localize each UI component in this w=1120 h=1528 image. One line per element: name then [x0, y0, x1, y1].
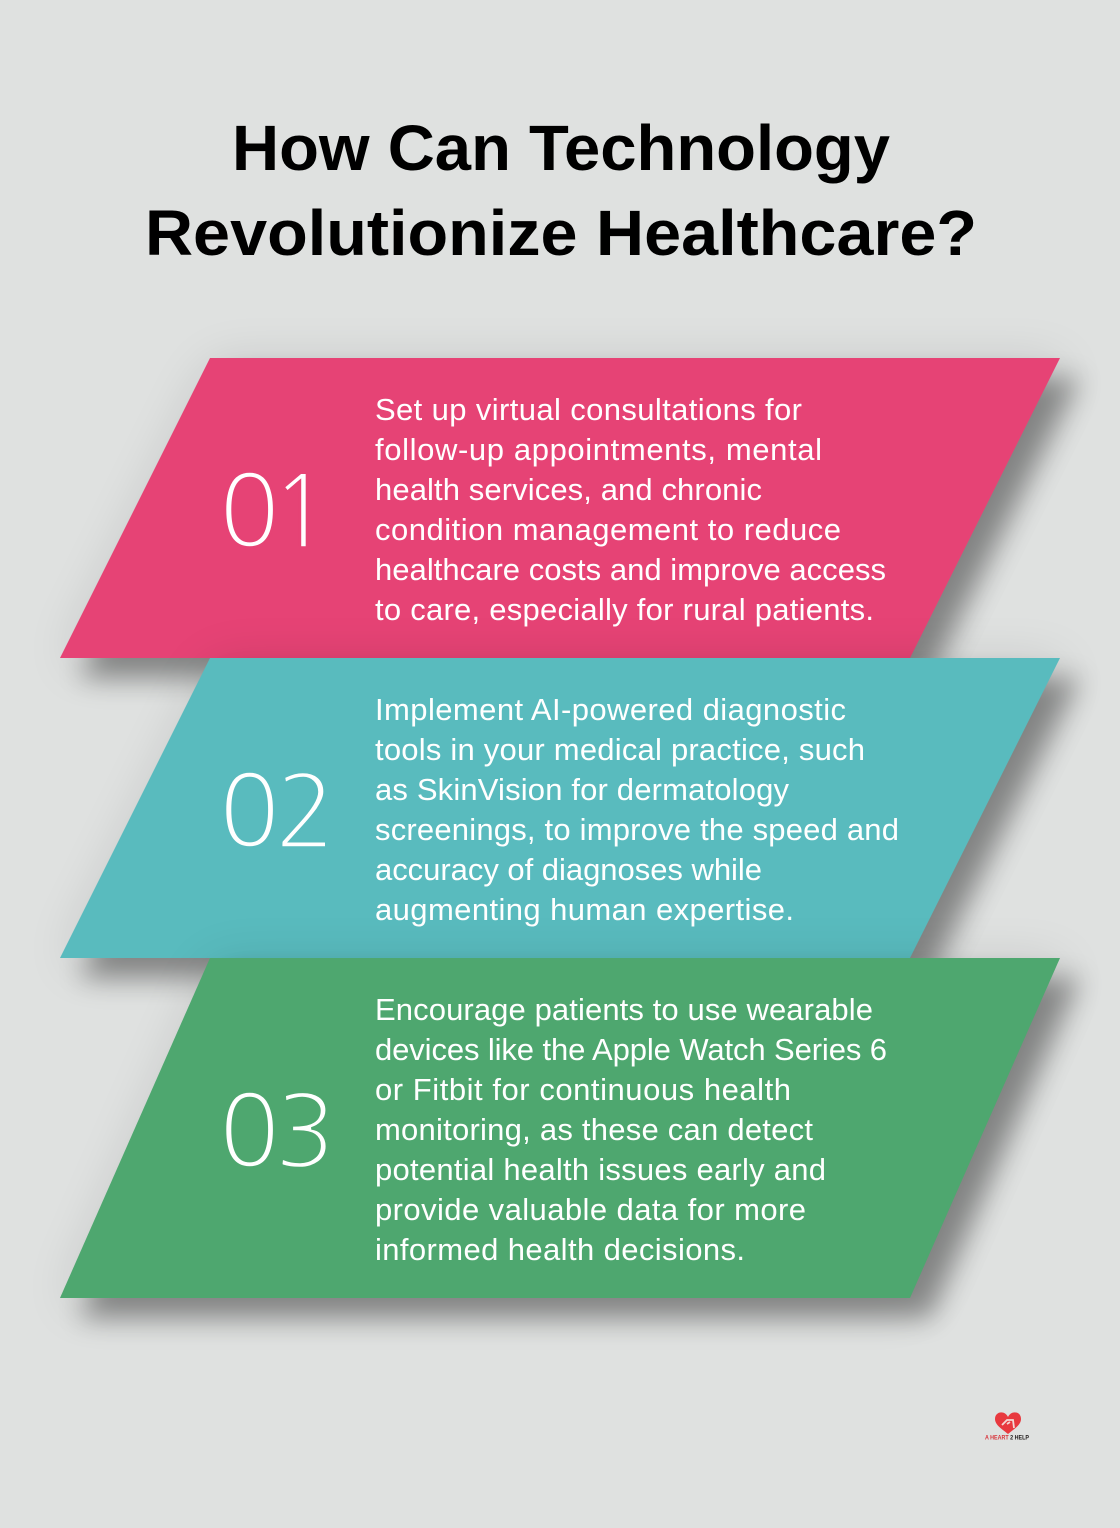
text: step 02 description: Implement AI-powered diagnostic: [375, 692, 846, 727]
text: step 02 description: as SkinVision for dermatology: [375, 772, 790, 807]
number 01: 01: [219, 462, 331, 562]
text: step 02 description: accuracy of diagnoses while: [375, 852, 762, 887]
text: step 03 description: [375, 992, 887, 1267]
text: step 01 description: [375, 392, 886, 627]
title: [145, 112, 977, 269]
title: How Can Technology: [232, 112, 890, 184]
text: step 02 description: screenings, to improve the speed and: [375, 812, 899, 847]
text: step 03 description: informed health decisions.: [375, 1232, 745, 1267]
logo wordmark: A HEART 2 HELP: [985, 1436, 1029, 1442]
text: step 01 description: Set up virtual consultations for: [375, 392, 802, 427]
panel: step 02: [60, 658, 1080, 978]
logo: A Heart 2 Help: [985, 1412, 1029, 1442]
text: step 03 description: Encourage patients to use wearable: [375, 992, 873, 1027]
text: step 02 description: augmenting human expertise.: [375, 892, 794, 927]
panel: step 03: [60, 958, 1080, 1318]
text: step 03 description: monitoring, as these can detect: [375, 1112, 813, 1147]
text: step 03 description: potential health issues early and: [375, 1152, 826, 1187]
text: step 03 description: or Fitbit for continuous health: [375, 1072, 791, 1107]
text: step 03 description: provide valuable data for more: [375, 1192, 806, 1227]
text: step 02 description: [375, 692, 899, 927]
text: step 03 description: devices like the Apple Watch Series 6: [375, 1032, 887, 1067]
text: step 01 description: follow-up appointments, mental: [375, 432, 822, 467]
text: step 01 description: healthcare costs and improve access: [375, 552, 886, 587]
text: step 02 description: tools in your medical practice, such: [375, 732, 865, 767]
text: step 01 description: health services, and chronic: [375, 472, 762, 507]
number 03: 03: [219, 1082, 336, 1182]
panel: step 01: [60, 358, 1080, 678]
number 02: 02: [219, 762, 336, 862]
text: step 01 description: to care, especially for rural patients.: [375, 592, 874, 627]
text: step 01 description: condition management to reduce: [375, 512, 841, 547]
icon: heart with hands: [995, 1412, 1021, 1434]
title: Revolutionize Healthcare?: [145, 197, 977, 269]
